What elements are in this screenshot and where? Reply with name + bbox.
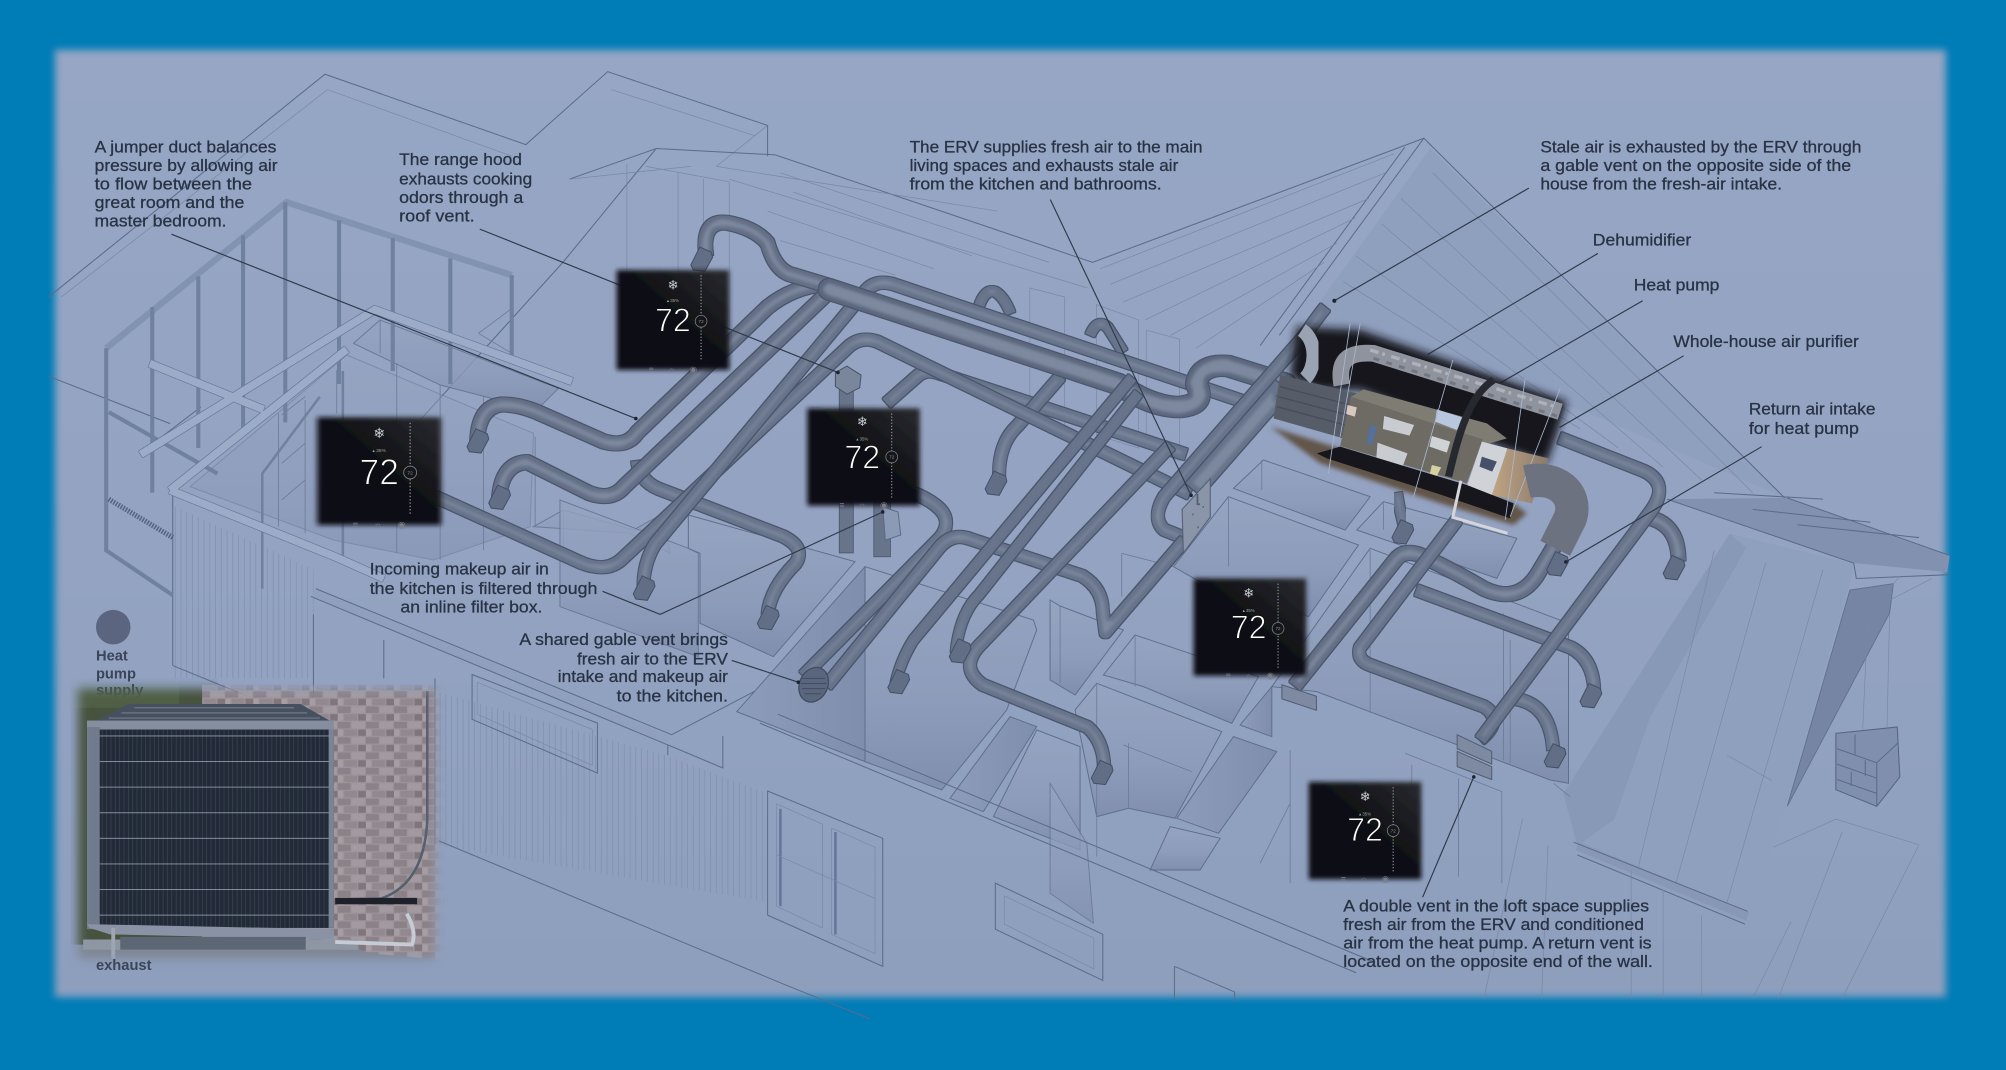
gable and roof planes	[1305, 148, 1950, 998]
callout: double vent: located on the opposite end of the wall.	[1343, 952, 1653, 971]
callout: ERV: living spaces and exhausts stale air	[910, 156, 1179, 175]
label: dehumidifier: Dehumidifier	[1593, 231, 1692, 250]
callout: makeup air	[370, 560, 597, 616]
thermostat: left wing: ▴ 35%	[373, 448, 387, 454]
legend label: Heat	[96, 648, 128, 664]
callout: makeup air: Incoming makeup air in	[370, 560, 549, 579]
thermostat: loft	[1309, 782, 1421, 884]
thermostat: great room: ▴ 35%	[856, 436, 868, 441]
callout: shared gable vent: to the kitchen.	[617, 686, 728, 705]
left wing wall tops	[141, 310, 572, 579]
callout: stale air: Stale air is exhausted by the ERV through	[1540, 137, 1861, 156]
main trunk duct	[705, 223, 832, 287]
thermostat: left wing	[317, 417, 441, 531]
window wall studs on the left wing	[106, 202, 512, 595]
double vents	[1282, 685, 1492, 779]
hidden hook ducts behind the trunk	[979, 291, 1678, 561]
legend dot	[96, 610, 130, 644]
thermostat readout: ❄	[668, 277, 678, 292]
callout: shared gable vent	[519, 630, 729, 705]
legend label	[96, 648, 144, 699]
thermostat readout: ❄	[1360, 789, 1370, 804]
intake ducts to the shared gable vent	[803, 484, 1185, 686]
thermostat: left wing: ≡ ☼ ◉	[352, 520, 406, 531]
register supply ducts	[896, 378, 1171, 773]
callout: jumper duct	[95, 137, 278, 231]
refrigerant lines and conduit	[335, 691, 427, 945]
round shared gable vent	[793, 663, 834, 707]
callout: jumper duct: to flow between the	[95, 174, 252, 193]
hanger rods	[1328, 323, 1560, 520]
brick wall	[202, 685, 445, 960]
callout: jumper duct: A jumper duct balances	[95, 137, 276, 156]
duct registers	[467, 247, 1685, 785]
ERV box	[1182, 479, 1210, 553]
concrete pad	[72, 944, 436, 965]
insulated supply box	[1273, 375, 1357, 438]
thermostat: loft: ≡ ☼ ◉	[1341, 874, 1390, 884]
inline filter box	[883, 507, 901, 540]
callout: range hood: exhausts cooking	[399, 169, 532, 188]
callout: stale air: a gable vent on the opposite side of the	[1540, 156, 1851, 175]
callout: shared gable vent: fresh air to the ERV	[577, 649, 729, 668]
roof vent for range hood	[835, 366, 890, 557]
foil ducts	[1302, 330, 1560, 416]
left wing rooms traced from crop	[190, 308, 670, 560]
callout: range hood: roof vent.	[399, 206, 475, 225]
roof outlines	[49, 72, 1785, 498]
duct network	[435, 223, 1685, 785]
callout: double vent	[1343, 896, 1653, 971]
branch duct: left register two	[499, 289, 832, 499]
thermostat readout: ❄	[857, 414, 868, 429]
callout: ERV: from the kitchen and bathrooms.	[910, 174, 1162, 193]
thermostat: kitchen: 72	[699, 319, 704, 324]
callout: shared gable vent: A shared gable vent brings	[519, 630, 728, 649]
thermostat readout: ❄	[1243, 586, 1254, 601]
callout: double vent: air from the heat pump. A return vent is	[1343, 933, 1652, 952]
callout: jumper duct: master bedroom.	[95, 212, 226, 231]
heat pump cabinet	[1340, 389, 1549, 503]
thermostat: kitchen: ≡ ☼ ◉	[649, 364, 697, 374]
leader lines	[171, 188, 1762, 897]
thermostat: central hallway	[1194, 579, 1306, 680]
thermostat: great room	[807, 408, 920, 510]
legend label: supply	[96, 683, 144, 699]
label: return air intake	[1749, 400, 1876, 438]
legend: exhaust label: exhaust	[96, 958, 152, 974]
legend label: pump	[96, 666, 136, 682]
callout: double vent: A double vent in the loft space supplies	[1343, 896, 1649, 915]
lower branch ducts	[637, 371, 1186, 614]
thermostat: central hallway: 72	[1275, 626, 1281, 631]
legend: heat pump supply	[96, 610, 144, 699]
callout: ERV: The ERV supplies fresh air to the main	[910, 137, 1203, 156]
callout: stale air: house from the fresh-air intake.	[1540, 174, 1782, 193]
siding and exterior wall	[173, 493, 870, 1019]
callout: stale air	[1540, 137, 1861, 193]
callout: double vent: fresh air from the ERV and conditioned	[1343, 915, 1644, 934]
brown floor	[1270, 427, 1527, 525]
label: whole-house air purifier: Whole-house air purifier	[1673, 332, 1859, 351]
label: return air intake: for heat pump	[1749, 419, 1859, 438]
callout: jumper duct: pressure by allowing air	[95, 156, 278, 175]
thermostat: loft: 72	[1347, 812, 1383, 849]
gable exhaust duct	[1158, 307, 1325, 538]
callout: range hood: The range hood	[399, 150, 522, 169]
thermostat readout: ❄	[373, 425, 385, 441]
grass and hedge	[70, 682, 218, 945]
condensate hose and drain	[1449, 380, 1508, 533]
thermostat: loft: ▴ 35%	[1359, 811, 1371, 816]
center rooms traced from crop	[560, 500, 1080, 850]
return plenum elbow	[1527, 480, 1572, 548]
thermostat: great room: ≡ ☼ ◉	[839, 500, 888, 510]
photo: outdoor condenser unit	[70, 678, 445, 973]
callout: range hood	[399, 150, 532, 225]
photo: air handling unit with dehumidifier and purifier	[1270, 323, 1572, 548]
thermostat: kitchen: 72	[655, 302, 691, 339]
eave, front wall lines and windows	[311, 589, 1375, 1001]
thermostat: left wing: 72	[359, 452, 399, 492]
thermostat: loft: 72	[1391, 828, 1396, 833]
dark mechanical space behind the unit	[1290, 327, 1567, 463]
callout: shared gable vent: intake and makeup air	[558, 667, 728, 686]
callout: makeup air: the kitchen is filtered through	[370, 579, 597, 598]
thermostat: great room: 72	[889, 455, 895, 460]
thermostat: central hallway: ≡ ☼ ◉	[1226, 670, 1274, 680]
callout: jumper duct: great room and the	[95, 193, 244, 212]
callout: makeup air: an inline filter box.	[400, 597, 542, 616]
branch duct: upper supply B	[644, 283, 1260, 586]
callout: ERV	[910, 137, 1203, 193]
label: return air intake: Return air intake	[1749, 400, 1876, 419]
thermostat: central hallway: 72	[1231, 610, 1267, 647]
return and heat pump ducts	[1295, 438, 1659, 750]
branch duct: left register one	[477, 284, 825, 443]
thermostat: kitchen	[617, 270, 729, 374]
main trunk duct large section	[829, 289, 1286, 407]
branch duct: lower supply C	[435, 340, 1190, 567]
thermostat: kitchen: ▴ 35%	[667, 298, 679, 303]
thermostat: left wing: 72	[407, 471, 413, 476]
callout: range hood: odors through a	[399, 188, 524, 207]
thermostat: great room: 72	[844, 439, 880, 476]
right rooms traced from crop	[1050, 460, 1570, 923]
thermostat: central hallway: ▴ 35%	[1243, 608, 1255, 613]
condenser body	[87, 704, 334, 959]
black base rails	[1317, 447, 1514, 518]
label: heat pump: Heat pump	[1634, 276, 1719, 295]
